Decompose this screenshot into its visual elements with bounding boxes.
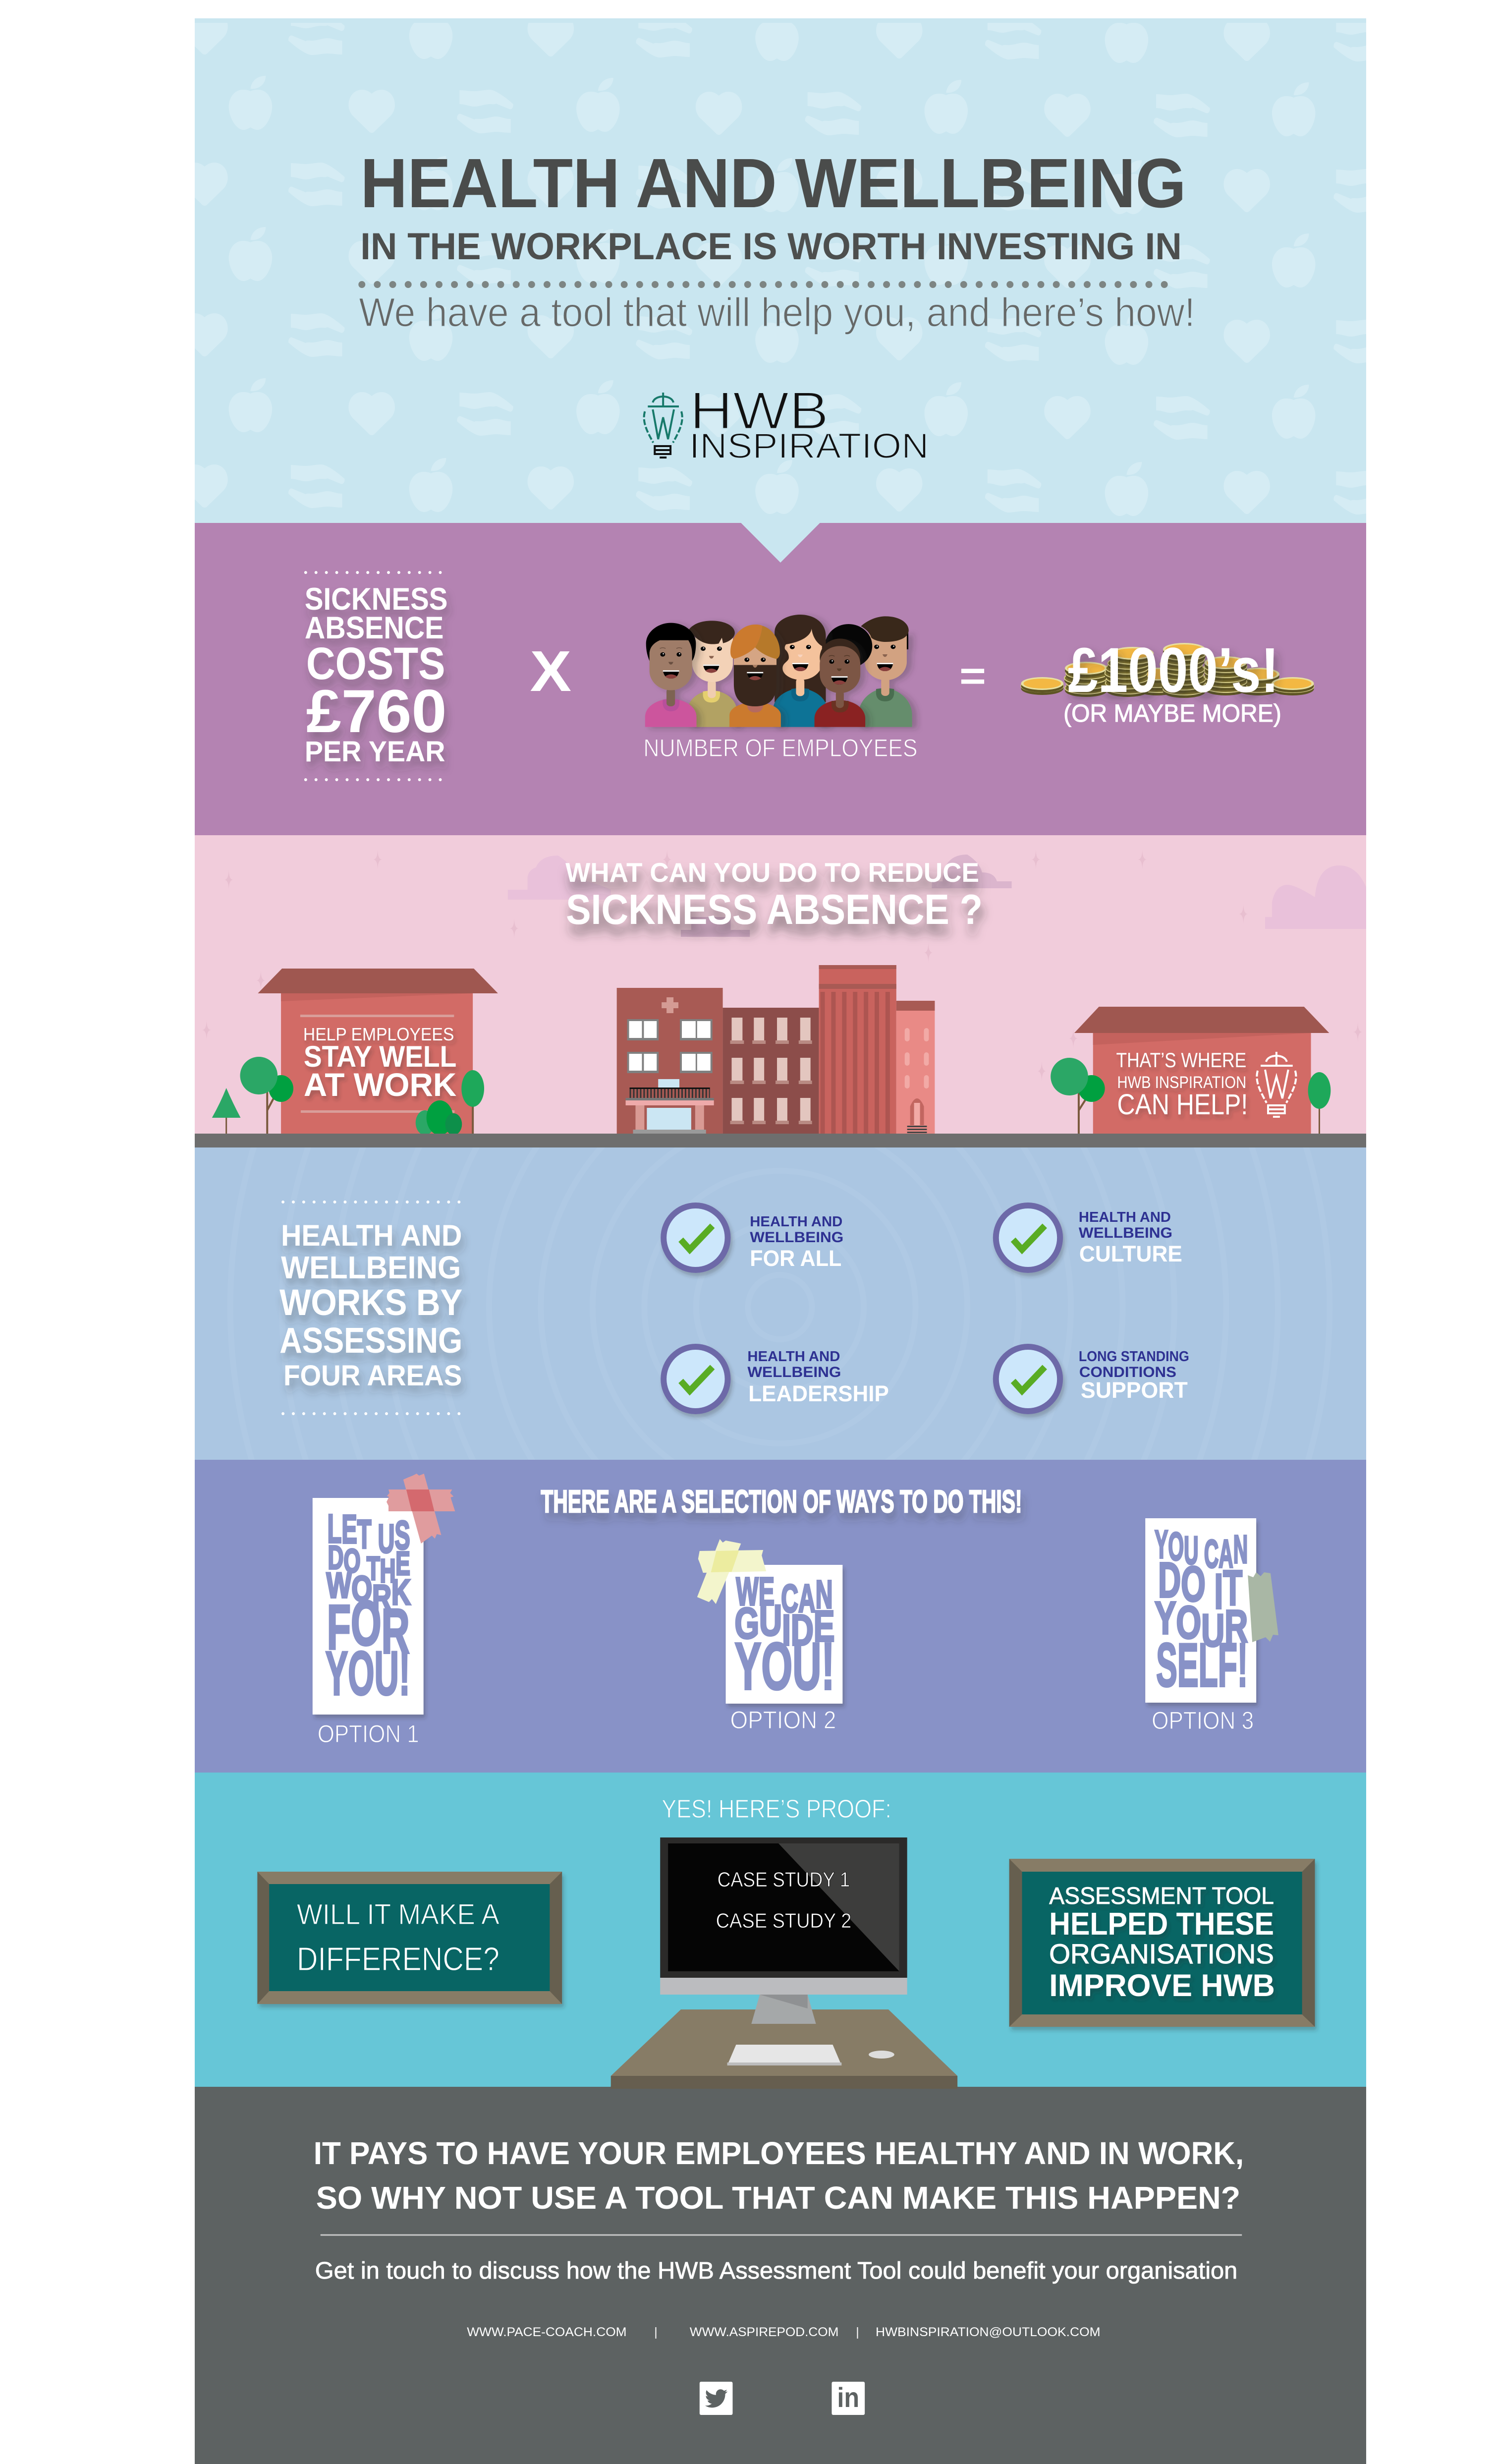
tape: green (1248, 1572, 1278, 1642)
card: option 1: DO THE (328, 1540, 410, 1590)
logo: HWB Inspiration (644, 381, 929, 466)
text: sickness absence costs 760 per year: ABSENCE (305, 611, 443, 645)
person 4 (774, 615, 827, 727)
label: long standing conditions support: SUPPORT (1081, 1377, 1188, 1403)
icon: check 2 (993, 1203, 1063, 1273)
board: will it make a difference: DIFFERENCE? (297, 1941, 499, 1978)
label: HWB culture: CULTURE (1079, 1241, 1182, 1266)
tape: yellow (697, 1539, 766, 1604)
call to action: Get in touch to discuss how the HWB Assessment Tool could benefit your organisation (315, 2258, 1237, 2284)
mouse (869, 2051, 894, 2059)
equals sign: = (959, 654, 986, 698)
building: help employees: AT WORK (304, 1066, 456, 1103)
trees: right group (1051, 1058, 1330, 1136)
label: option 3: OPTION 3 (1152, 1707, 1254, 1734)
screen text (716, 1868, 851, 1932)
card: option 2: GUIDE (734, 1596, 834, 1655)
text: works by assessing four areas: FOUR AREAS (283, 1360, 462, 1392)
label: long standing conditions support: LONG STANDING (1079, 1349, 1189, 1365)
label: long standing conditions support: CONDITIONS (1079, 1364, 1176, 1380)
screen text: CASE STUDY 1 (718, 1868, 850, 1891)
panel: four areas (195, 1147, 1366, 1460)
subtitle: IN THE WORKPLACE IS WORTH INVESTING IN (360, 226, 1182, 268)
trees: left group (212, 1057, 484, 1135)
icon: linkedin (831, 2382, 865, 2415)
text: sickness absence costs 760 per year: COSTS (306, 638, 445, 689)
building: that's where HWB can help (1074, 1007, 1329, 1134)
board: assessment tool helped (1009, 1859, 1315, 2027)
text: sickness absence costs 760 per year: PER YEAR (305, 736, 445, 768)
heading (565, 857, 983, 933)
contact links (467, 2325, 1101, 2339)
icon: linkedin: in (837, 2382, 859, 2413)
panel: header (181, 5, 1390, 523)
label: HWB culture: WELLBEING (1079, 1225, 1172, 1241)
card: option 2: WE CAN (736, 1569, 832, 1620)
label: long standing conditions support (1079, 1349, 1189, 1403)
label: HWB for all: HEALTH AND (750, 1214, 842, 1230)
label: HWB leadership: HEALTH AND (747, 1349, 840, 1365)
label: HWB culture (1079, 1209, 1182, 1266)
text: works by assessing four areas: WORKS BY (279, 1282, 462, 1323)
card: option 3: SELF! (1156, 1631, 1248, 1700)
panel: footer (195, 2086, 1366, 2464)
closing statement: SO WHY NOT USE A TOOL THAT CAN MAKE THIS HAPPEN? (316, 2180, 1240, 2216)
building: hospital (617, 965, 935, 1134)
logo: HWB Inspiration: HWB (690, 381, 829, 440)
text: sickness absence costs 760 per year: £760 (306, 677, 446, 745)
board: assessment tool helped: ASSESSMENT TOOL (1049, 1883, 1274, 1909)
label: option 1: OPTION 1 (318, 1720, 419, 1748)
person 5 back hair (825, 624, 872, 668)
person 5 (815, 638, 865, 727)
closing statement (314, 2135, 1244, 2216)
panel: proof (195, 1773, 1366, 2089)
label: HWB culture: HEALTH AND (1079, 1209, 1171, 1225)
person 1 (645, 623, 697, 727)
text: works by assessing four areas: ASSESSING (279, 1321, 462, 1361)
card: option 3: YOUR (1155, 1592, 1248, 1656)
card: option 3 (1145, 1518, 1278, 1703)
panel: options (195, 1460, 1366, 1773)
screen text: CASE STUDY 2 (716, 1909, 851, 1932)
closing statement: IT PAYS TO HAVE YOUR EMPLOYEES HEALTHY AND IN WORK, (314, 2135, 1244, 2171)
building: help employees: STAY WELL (304, 1040, 456, 1073)
label: HWB leadership: WELLBEING (747, 1364, 841, 1380)
label: HWB for all: WELLBEING (750, 1229, 843, 1246)
building: help employees: HELP EMPLOYEES (303, 1025, 454, 1044)
person 2 (687, 621, 737, 727)
result: thousands of pounds: £1000’s! (1068, 635, 1279, 706)
text: sickness absence costs 760 per year: SICKNESS (305, 582, 447, 617)
icon: twitter (700, 2382, 732, 2415)
tagline: We have a tool that will help you, and here’s how! (359, 290, 1195, 335)
clouds (508, 855, 1366, 937)
contact links: | (856, 2325, 859, 2339)
contact links: | (654, 2325, 658, 2339)
heading: YES! HERE’S PROOF: (662, 1794, 891, 1823)
card: option 1: WORK (327, 1566, 411, 1618)
board: assessment tool helped: HELPED THESE (1049, 1906, 1274, 1942)
logo: HWB Inspiration: INSPIRATION (689, 427, 929, 466)
label: HWB leadership: LEADERSHIP (748, 1381, 889, 1406)
label: option 2: OPTION 2 (730, 1706, 836, 1734)
text: sickness absence costs 760 per year (305, 582, 447, 768)
heading: THERE ARE A SELECTION OF WAYS TO DO THIS! (541, 1484, 1022, 1519)
heading: WHAT CAN YOU DO TO REDUCE (565, 857, 979, 888)
card: option 3: YOU CAN (1155, 1522, 1248, 1576)
contact links: HWBINSPIRATION@OUTLOOK.COM (876, 2325, 1101, 2339)
card: option 1: LET US (328, 1506, 410, 1561)
illustration: group of employees (645, 615, 912, 727)
person 3 (729, 625, 781, 727)
board: will it make a difference (257, 1872, 562, 2004)
board: assessment tool helped: IMPROVE HWB (1049, 1968, 1275, 2003)
label: number of employees: NUMBER OF EMPLOYEES (643, 734, 918, 762)
icon: lightbulb (644, 393, 682, 443)
person 6 hair (861, 616, 909, 642)
heading: SICKNESS ABSENCE ? (566, 886, 983, 933)
multiply sign: X (530, 639, 571, 703)
text: works by assessing four areas: WELLBEING (281, 1250, 461, 1285)
card: option 1 (313, 1474, 455, 1715)
contact links: WWW.PACE-COACH.COM (467, 2325, 627, 2339)
desk (611, 2009, 957, 2089)
building: that's where HWB can help: HWB INSPIRATION (1117, 1073, 1246, 1092)
illustration: coin stacks (1021, 643, 1314, 698)
panel: sickness absence costs (195, 522, 1366, 835)
text: works by assessing four areas (279, 1219, 462, 1392)
result note: (OR MAYBE MORE) (1063, 699, 1281, 727)
text: works by assessing four areas: HEALTH AND (281, 1219, 462, 1252)
person 6 (858, 632, 912, 727)
board: will it make a difference: WILL IT MAKE A (297, 1899, 499, 1931)
icon: check 3 (661, 1344, 730, 1414)
icon: check 1 (661, 1203, 730, 1273)
keyboard (727, 2045, 841, 2065)
building: that's where HWB can help: THAT’S WHERE (1116, 1048, 1246, 1072)
building: that's where HWB can help: CAN HELP! (1117, 1089, 1248, 1121)
monitor (660, 1837, 907, 2024)
card: option 1: YOU! (326, 1639, 410, 1708)
tape: red (387, 1474, 455, 1544)
road (195, 1134, 1366, 1147)
label: HWB leadership (747, 1349, 889, 1406)
icon: white lightbulb (1257, 1052, 1296, 1117)
contact links: WWW.ASPIREPOD.COM (690, 2325, 838, 2339)
card: option 2 (697, 1539, 842, 1704)
label: HWB for all (750, 1214, 843, 1271)
card: option 1: FOR (327, 1588, 410, 1667)
card: option 2: YOU! (734, 1629, 834, 1704)
board: assessment tool helped: ORGANISATIONS (1049, 1938, 1274, 1969)
icon: check 4 (993, 1344, 1063, 1414)
label: HWB for all: FOR ALL (750, 1246, 841, 1271)
building: help employees (258, 969, 498, 1134)
panel: what can you do (195, 835, 1366, 1147)
card: option 3: DO IT (1158, 1553, 1242, 1619)
title: HEALTH AND WELLBEING (360, 144, 1186, 222)
